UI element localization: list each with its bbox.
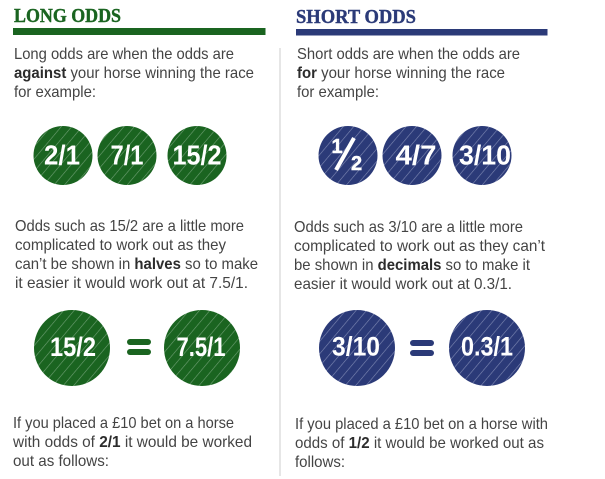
text: short odds example: odds of 1/2 it would be worked out as bbox=[295, 435, 544, 452]
text: short odds example: follows: bbox=[295, 454, 345, 471]
text: long odds explanation: it easier it would work out at 7.5/1. bbox=[15, 275, 248, 292]
text: long odds explanation bbox=[15, 218, 258, 292]
text: short odds definition: for example: bbox=[297, 84, 379, 101]
odds circles: short bbox=[318, 126, 512, 185]
panel: short odds bbox=[294, 6, 548, 471]
text: long odds example: with odds of 2/1 it would be worked bbox=[12, 434, 252, 451]
odds circles: long bbox=[34, 126, 226, 185]
odds circles: short: 1 bbox=[331, 136, 343, 158]
equation: 15/2 = 7.5/1: 7.5/1 bbox=[176, 332, 226, 362]
text: short odds definition bbox=[297, 46, 520, 101]
text: long odds example: out as follows: bbox=[13, 453, 109, 470]
odds circles: short: 4/7 bbox=[396, 140, 436, 170]
heading: long odds: LONG ODDS bbox=[14, 5, 121, 27]
text: short odds definition: Short odds are when the odds are bbox=[297, 46, 520, 63]
equation: 3/10 = 0.3/1: 3/10 bbox=[332, 332, 380, 362]
equation: 15/2 = 7.5/1: 15/2 bbox=[50, 332, 96, 362]
text: short odds explanation: Odds such as 3/10 are a little more bbox=[294, 219, 523, 236]
text: short odds explanation bbox=[294, 219, 546, 293]
heading bar: short odds bbox=[296, 29, 548, 36]
text: long odds definition: Long odds are when the odds are bbox=[14, 46, 234, 63]
text: long odds explanation: complicated to work out as they bbox=[15, 237, 226, 254]
text: long odds definition: for example: bbox=[14, 84, 96, 101]
panel: long odds bbox=[12, 5, 265, 470]
text: long odds example: If you placed a £10 bet on a horse bbox=[13, 415, 234, 432]
equation: 15/2 = 7.5/1 bbox=[34, 310, 240, 386]
odds circles: long: 2/1 bbox=[44, 140, 80, 170]
text: short odds explanation: be shown in decimals so to make it bbox=[294, 257, 531, 274]
text: long odds example bbox=[12, 415, 252, 470]
text: short odds explanation: easier it would work out at 0.3/1. bbox=[294, 276, 512, 293]
equation: 3/10 = 0.3/1 bbox=[319, 310, 525, 386]
equation: 3/10 = 0.3/1: 0.3/1 bbox=[461, 332, 513, 362]
odds circles: short: 3/10 bbox=[459, 140, 511, 170]
text: short odds example: If you placed a £10 bet on a horse with bbox=[295, 416, 548, 433]
odds circles: long: 15/2 bbox=[172, 140, 222, 170]
odds circles: short: 2 bbox=[351, 153, 362, 175]
text: short odds definition: for your horse winning the race bbox=[297, 65, 505, 82]
heading: short odds: SHORT ODDS bbox=[296, 6, 416, 28]
text: long odds definition bbox=[14, 46, 254, 101]
text: long odds explanation: Odds such as 15/2 are a little more bbox=[15, 218, 244, 235]
text: long odds definition: against your horse winning the race bbox=[14, 65, 254, 82]
text: short odds explanation: complicated to work out as they can’t bbox=[294, 238, 546, 255]
text: long odds explanation: can’t be shown in halves so to make bbox=[15, 256, 258, 273]
text: short odds example bbox=[295, 416, 548, 471]
odds circles: long: 7/1 bbox=[110, 140, 144, 170]
heading bar: long odds bbox=[13, 28, 266, 35]
